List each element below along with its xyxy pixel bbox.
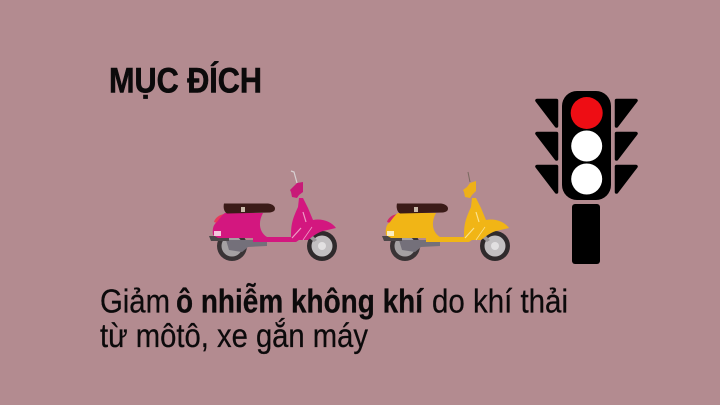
title: MỤC ĐÍCH	[109, 60, 262, 100]
red light	[571, 97, 603, 129]
text block: description: từ môtô, xe gắn máy	[100, 317, 368, 354]
icon: yellow scooter	[382, 172, 510, 261]
icon: pink scooter	[209, 171, 337, 261]
text block: description: do khí thải	[432, 282, 568, 320]
text block: description	[100, 282, 568, 354]
traffic light housing	[562, 91, 611, 200]
text block: description: Giảm	[100, 282, 170, 320]
traffic light pole	[572, 204, 600, 264]
white lower light	[571, 164, 602, 194]
white middle light	[571, 130, 602, 162]
left visors	[537, 100, 556, 192]
text block: description: ô nhiễm không khí	[176, 282, 425, 320]
icon: traffic light	[537, 91, 636, 264]
right visors	[616, 100, 636, 192]
